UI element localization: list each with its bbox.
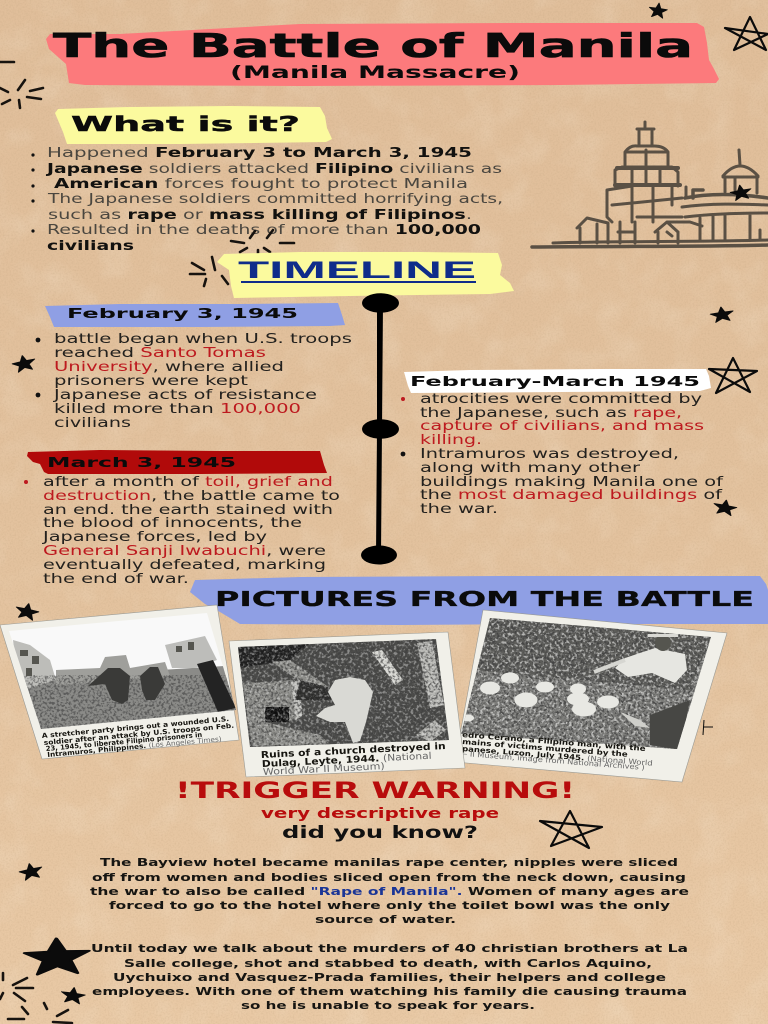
photo: stretcher party: 23, 1945, to liberate Filipino prisoners in xyxy=(45,731,203,753)
bottom left stars xyxy=(18,861,90,1004)
trigger warning xyxy=(175,778,575,822)
timeline entry: March 3, 1945: March 3, 1945 xyxy=(47,456,236,471)
photo: Pedro Cerano with remains: – II Museum, image from National Archives ) xyxy=(463,749,645,772)
what is it bullet list: such as rape or mass killing of Filipinos . xyxy=(48,208,472,223)
photo: stretcher party xyxy=(0,605,240,759)
heading: pictures from the battle: PICTURES FROM THE BATTLE xyxy=(215,587,754,611)
paragraph: Bayview hotel: source of water. xyxy=(315,914,456,926)
paragraph: La Salle brothers: Uychuixo and Vasquez-Prada families, their helpers and college xyxy=(113,972,666,984)
what is it bullet list: American forces fought to protect Manila xyxy=(54,177,468,192)
timeline entry: February 3, 1945: University , where allied xyxy=(54,360,284,375)
timeline entry: February-March 1945: the most damaged buildings of xyxy=(420,488,723,503)
timeline entry: February-March 1945: the Japanese, such as rape, xyxy=(420,406,682,421)
timeline entry: March 3, 1945: Japanese forces, led by xyxy=(42,530,267,545)
paragraph: Bayview hotel: The Bayview hotel became manilas rape center, nipples were sliced xyxy=(100,857,678,869)
timeline entry: February 3, 1945: prisoners were kept xyxy=(54,374,248,389)
timeline entry: February 3, 1945: civilians xyxy=(54,416,131,431)
photo: stretcher party: Intramuros, Philippines. (Los Angeles Times) xyxy=(47,735,222,759)
paragraph: La Salle brothers xyxy=(91,943,688,1012)
paragraph: Bayview hotel: off from women and bodies sliced open from the neck down, causing xyxy=(92,872,686,884)
timeline entry: March 3, 1945: General Sanji Iwabuchi , were xyxy=(43,544,326,559)
decorative sparks around timeline xyxy=(190,230,294,286)
timeline entry: March 3, 1945: destruction , the battle came to xyxy=(43,489,340,504)
trigger warning: very descriptive rape xyxy=(261,806,499,822)
what is it bullet list xyxy=(31,146,503,254)
paragraph: Bayview hotel: the war to also be called "Rape of Manila". Women of many ages are xyxy=(90,886,689,898)
photo: ruins of a church: Dulag, Leyte, 1944. (National xyxy=(262,751,432,770)
trigger warning: !TRIGGER WARNING! xyxy=(175,778,575,804)
church sketch xyxy=(532,122,768,247)
heading: what is it xyxy=(55,106,332,144)
timeline entry: February-March 1945: Intramuros was destroyed, xyxy=(420,447,679,462)
timeline entry: March 3, 1945: after a month of toil, grief and xyxy=(43,475,333,490)
photo: Pedro Cerano with remains: panese, Luzon, July 1945. (National World xyxy=(462,744,653,768)
photo: ruins of a church: Ruins of a church destroyed in xyxy=(261,741,446,761)
heading: did you know: did you know? xyxy=(282,823,478,843)
hand drawn star near did you know xyxy=(540,811,602,848)
photo: stretcher party: soldier after an attack by U.S. troops on Feb. xyxy=(43,722,234,747)
heading: pictures from the battle xyxy=(190,576,768,625)
timeline entry: February 3, 1945: killed more than 100,000 xyxy=(54,402,301,417)
photo: Pedro Cerano with remains: mains of victims murdered by the xyxy=(462,737,628,759)
paragraph: La Salle brothers: employees. With one of them watching his family die causing trauma xyxy=(92,986,687,998)
timeline entry: February-March 1945: capture of civilians, and mass xyxy=(420,419,704,434)
timeline entry: February 3, 1945: battle began when U.S. troops xyxy=(54,332,352,347)
timeline entry: March 3, 1945: the end of war. xyxy=(43,572,189,587)
decorative sparks top left xyxy=(0,62,43,108)
timeline entry: February-March 1945 xyxy=(401,369,724,517)
title banner: (Manila Massacre) xyxy=(230,63,520,82)
decorative sparks bottom left xyxy=(0,973,72,1023)
photo: ruins of a church: World War II Museum) xyxy=(263,761,385,778)
photo: ruins of a church xyxy=(229,632,465,778)
timeline entry: March 3, 1945: an end. the earth stained with xyxy=(43,503,333,518)
timeline entry: February-March 1945: buildings making Manila one of xyxy=(420,475,724,490)
photo: Pedro Cerano with remains: edro Cerano, a Filipino man, with the xyxy=(462,730,646,753)
timeline entry: February 3, 1945: reached Santo Tomas xyxy=(54,346,266,361)
scattered stars along the timeline xyxy=(11,305,757,735)
title banner: The Battle of Manila xyxy=(53,26,693,65)
what is it bullet list: The Japanese soldiers committed horrifying acts, xyxy=(47,192,503,207)
timeline entry: February-March 1945: atrocities were committed by xyxy=(420,392,702,407)
timeline entry: February-March 1945: killing. xyxy=(420,433,482,448)
timeline entry: February 3, 1945: February 3, 1945 xyxy=(67,307,298,322)
timeline entry: March 3, 1945 xyxy=(24,450,340,587)
paragraph: La Salle brothers: so he is unable to speak for years. xyxy=(241,1000,535,1012)
timeline entry: March 3, 1945: the blood of innocents, the xyxy=(43,516,302,531)
heading: what is it: What is it? xyxy=(71,112,300,136)
timeline heading xyxy=(217,252,514,298)
timeline entry: March 3, 1945: eventually defeated, marking xyxy=(43,558,326,573)
star cluster: top stars xyxy=(648,2,768,201)
paragraph: La Salle brothers: Salle college, shot and stabbed to death, with Carlos Aquino, xyxy=(124,958,652,970)
what is it bullet list: civilians xyxy=(47,239,134,254)
paragraph: Bayview hotel xyxy=(90,857,689,926)
photo: Pedro Cerano with remains xyxy=(455,610,727,782)
what is it bullet list: Resulted in the deaths of more than 100,000 xyxy=(47,223,481,238)
title banner xyxy=(46,23,719,86)
timeline entry: February 3, 1945: Japanese acts of resistance xyxy=(53,388,317,403)
timeline entry: February-March 1945: February-March 1945 xyxy=(410,375,700,390)
timeline heading: TIMELINE xyxy=(238,257,476,284)
timeline entry: February 3, 1945 xyxy=(36,303,352,431)
photo: stretcher party: A stretcher party brings out a wounded U.S. xyxy=(41,715,229,740)
paragraph: Bayview hotel: forced to go to the hotel where only the toilet bowl was the only xyxy=(109,900,670,912)
what is it bullet list: Japanese soldiers attacked Filipino civilians as xyxy=(46,162,502,177)
what is it bullet list: Happened February 3 to March 3, 1945 xyxy=(47,146,472,161)
paragraph: La Salle brothers: Until today we talk about the murders of 40 christian brothers at La xyxy=(91,943,688,955)
timeline entry: February-March 1945: along with many other xyxy=(420,461,641,476)
timeline entry: February-March 1945: the war. xyxy=(420,502,498,517)
timeline axis with three nodes xyxy=(361,293,399,564)
